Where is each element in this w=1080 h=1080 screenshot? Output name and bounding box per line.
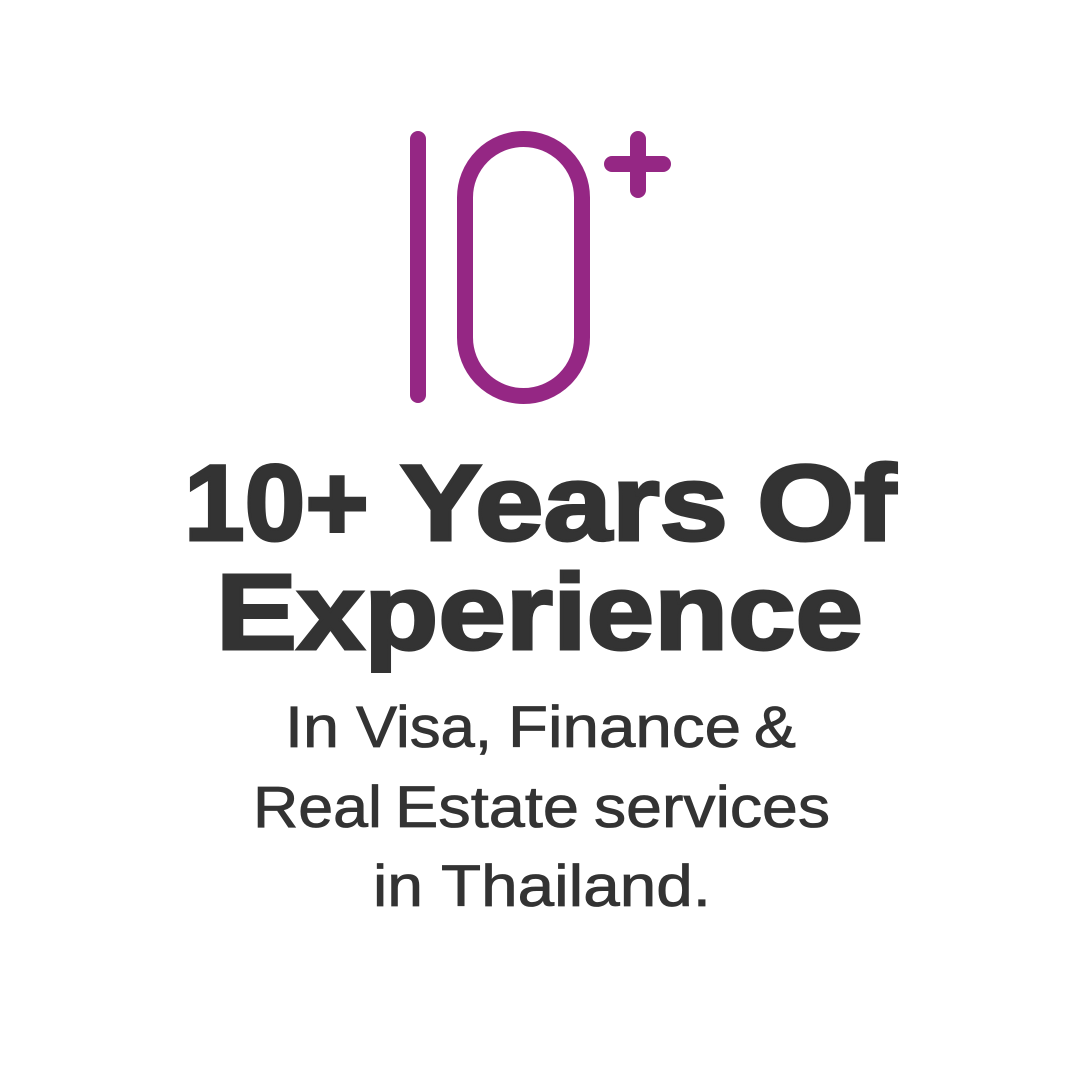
subheading text: &	[754, 695, 796, 760]
subheading text: In	[285, 695, 339, 760]
subheading text: services	[594, 775, 830, 840]
subheading text	[253, 695, 830, 919]
subheading text: Thailand.	[441, 854, 711, 919]
subheading text: Finance	[508, 695, 741, 760]
subheading text: Estate	[395, 775, 579, 840]
subheading text: Real	[253, 775, 382, 840]
subheading text: in	[373, 854, 423, 919]
heading	[184, 442, 897, 672]
heading: Experience	[216, 551, 863, 672]
subheading text: Visa,	[356, 695, 492, 760]
heading: Of	[757, 442, 897, 563]
icon: 10+ numeral	[418, 139, 663, 396]
heading: Years	[400, 442, 728, 563]
heading: 10+	[184, 442, 369, 563]
